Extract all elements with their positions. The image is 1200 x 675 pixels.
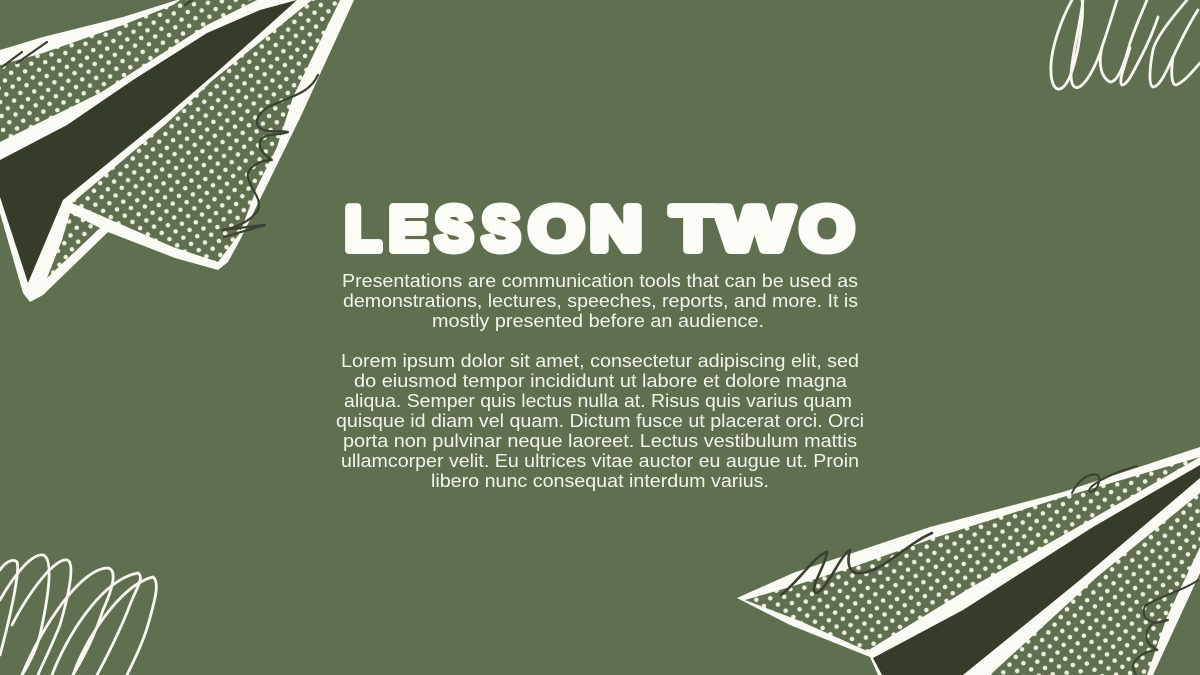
text block: intro paragraph: Presentations are communication tools that can be used as xyxy=(342,271,858,291)
text block: lorem paragraph: libero nunc consequat interdum varius. xyxy=(431,471,769,491)
text block: lorem paragraph xyxy=(336,351,864,491)
text block: intro paragraph xyxy=(342,271,858,331)
text block: intro paragraph: demonstrations, lectures, speeches, reports, and more. It is xyxy=(343,291,858,311)
scribble: top right xyxy=(1051,0,1200,89)
small fold dotted xyxy=(47,213,100,278)
dark fold xyxy=(873,465,1200,675)
title: S xyxy=(482,195,520,264)
title xyxy=(345,195,854,264)
dark fold xyxy=(0,0,297,283)
title: T xyxy=(671,195,715,264)
squiggle: bottom right plane right xyxy=(1133,580,1198,675)
squiggle: bottom right plane upper xyxy=(781,533,932,595)
text block: intro paragraph: mostly presented before an audience. xyxy=(432,311,764,331)
squiggle: top left plane xyxy=(222,75,318,237)
title: N xyxy=(590,195,642,264)
scribble: bottom left xyxy=(0,555,156,675)
lower wing dotted xyxy=(72,0,340,262)
upper wing dotted xyxy=(745,457,1200,651)
top wing dotted xyxy=(0,0,257,142)
title: S xyxy=(435,195,473,264)
hatch marks: top left plane xyxy=(2,0,192,67)
title: E xyxy=(389,195,428,264)
paper plane: top left xyxy=(0,0,354,302)
title: O xyxy=(800,195,854,264)
text block: lorem paragraph: aliqua. Semper quis lectus nulla at. Risus quis varius quam xyxy=(344,391,852,411)
text block: lorem paragraph: quisque id diam vel quam. Dictum fusce ut placerat orci. Orci xyxy=(336,411,864,431)
title: W xyxy=(716,195,794,264)
paper plane: bottom right xyxy=(737,447,1200,675)
lower wing dotted xyxy=(990,493,1200,675)
text block: lorem paragraph: do eiusmod tempor incididunt ut labore et dolore magna xyxy=(354,371,848,391)
text block: lorem paragraph: porta non pulvinar neque laoreet. Lectus vestibulum mattis xyxy=(343,431,857,451)
title: L xyxy=(345,195,381,264)
text block: lorem paragraph: ullamcorper velit. Eu ultrices vitae auctor eu augue ut. Proin xyxy=(341,451,859,471)
squiggle: bottom right plane top edge xyxy=(1072,466,1137,493)
title: O xyxy=(529,195,584,264)
text block: lorem paragraph: Lorem ipsum dolor sit amet, consectetur adipiscing elit, sed xyxy=(341,351,859,371)
